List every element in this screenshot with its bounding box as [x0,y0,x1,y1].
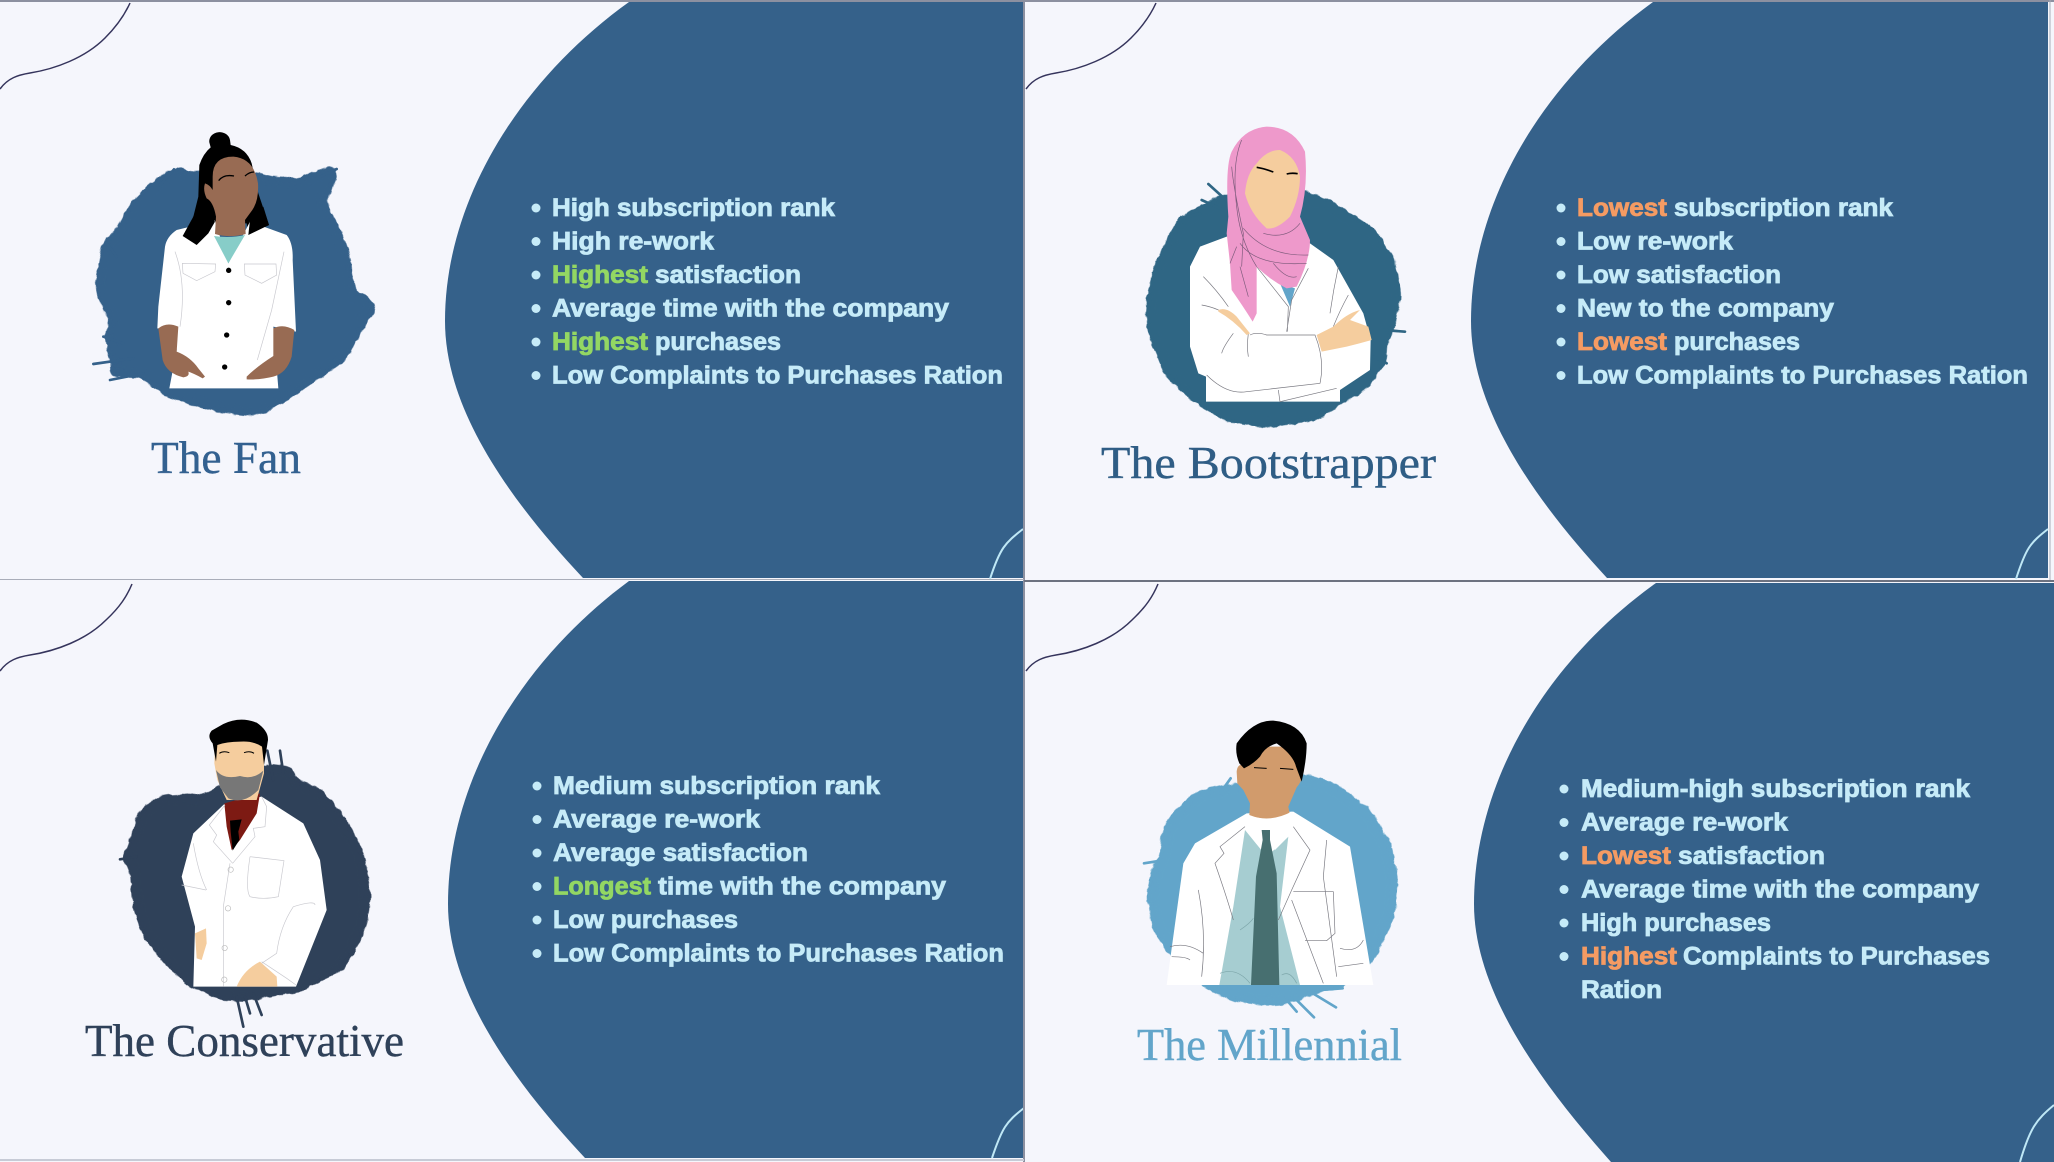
corner curve top left [0,584,132,671]
eyebrows [1254,768,1293,769]
shirt collar [1248,812,1292,850]
bullet list: Highest [552,328,649,356]
bullet list: High purchases [1581,909,1771,937]
lab coat [1190,237,1371,402]
bullet list: Lowest [1581,842,1672,870]
pockets and seams [175,252,284,360]
coat buttons [222,867,233,982]
buttons [222,268,231,370]
hair [1236,721,1307,782]
bullet list: High re-work [552,228,714,256]
blue curved background [448,581,1024,1158]
bullet list: Average time with the company [1581,876,1979,904]
face and neck [1237,747,1302,819]
hair [183,132,269,245]
face [214,740,264,800]
bullet list: Average satisfaction [553,839,808,867]
panel: The Conservative [0,581,1024,1158]
corner curve top left [1026,3,1156,89]
blue curved background [445,2,1023,578]
face [1245,150,1300,229]
corner arc bottom right [2020,1105,2054,1162]
bullet list: Lowest [1577,194,1668,222]
bullet list: Longest [553,872,652,900]
bullet list: Complaints to Purchases [1683,942,1990,970]
lab coat [1167,812,1373,985]
corner curve top left [1026,584,1158,671]
collar [214,235,245,263]
brush blob [95,165,377,417]
brush blob [1147,773,1398,1007]
vest [1219,830,1300,985]
eyebrows [1257,167,1298,174]
lapels and pocket [1170,827,1363,983]
brush spikes [120,751,352,1027]
bullet list: Medium-high subscription rank [1581,775,1970,803]
jacket [157,221,296,388]
arms [158,325,205,378]
bullet list: Average re-work [1581,808,1788,836]
hijab [1227,127,1310,322]
vest creases [1220,918,1297,983]
portrait: the conservative [120,720,371,1027]
bullet list: Low Complaints to Purchases Ration [552,362,1003,390]
bullet list: time with the company [658,872,946,900]
corner arc bottom right [990,529,1023,579]
bullet list: Highest [1581,942,1678,970]
bullet list: Low satisfaction [1577,261,1781,289]
beard [216,770,263,800]
name: The Millennial: The Millennial [1137,1020,1402,1070]
blue curved background [1474,583,2054,1162]
tie [230,819,242,851]
brush blob [1145,188,1402,428]
bullet list [532,772,1004,968]
name: The Bootstrapper: The Bootstrapper [1101,438,1436,488]
hands [195,928,207,960]
bullet list: Ration [1581,976,1662,1004]
bullet list: Low re-work [1577,228,1733,256]
bullet list: High subscription rank [552,194,835,222]
blue curved background [1471,2,2048,578]
eyebrows [219,172,254,181]
bullet list: Average time with the company [552,294,949,322]
bullet list [1556,194,2028,390]
portrait: the bootstrapper [1145,127,1405,428]
portrait: the millennial [1144,721,1398,1017]
bullet list: Low Complaints to Purchases Ration [553,940,1004,968]
neck and face [204,157,258,236]
hijab folds [1230,140,1308,297]
corner arc bottom right [992,1108,1024,1158]
left hand [1218,309,1250,335]
shirt [224,793,260,850]
name: The Conservative: The Conservative [85,1016,404,1066]
corner arc bottom right [2016,529,2048,579]
bullet list: purchases [655,328,781,356]
bullet list: satisfaction [1678,842,1825,870]
panel: The Bootstrapper [1026,2,2048,579]
corner curve top left [0,3,130,89]
bullet list: Medium subscription rank [553,772,880,800]
hair [209,720,268,765]
panel: The Millennial [1026,583,2054,1162]
brush blob [122,763,371,1002]
bullet list: subscription rank [1674,194,1893,222]
bullet list: purchases [1674,328,1800,356]
eyebrows [219,752,254,753]
coat details [182,797,315,987]
bullet list: Low purchases [553,906,738,934]
name: The Fan: The Fan [151,433,301,483]
brush spikes [1144,778,1343,1017]
coat lapel lines [1202,267,1348,402]
brush spikes [1183,184,1405,420]
bullet list [1560,775,1990,1004]
panel: The Fan [0,2,1023,579]
bullet list: Highest [552,261,649,289]
bullet list: Average re-work [553,806,760,834]
lab coat [182,797,327,987]
bullet list [532,194,1003,390]
hair over shoulder [183,210,215,245]
brush spikes [93,169,337,380]
tie [1251,830,1279,985]
right hand [1317,310,1372,352]
portrait: the fan [93,132,377,417]
bullet list: Lowest [1577,328,1668,356]
undershirt [1280,283,1295,307]
bullet list: New to the company [1577,294,1834,322]
bullet list: satisfaction [655,261,801,289]
bullet list: Low Complaints to Purchases Ration [1577,362,2028,390]
